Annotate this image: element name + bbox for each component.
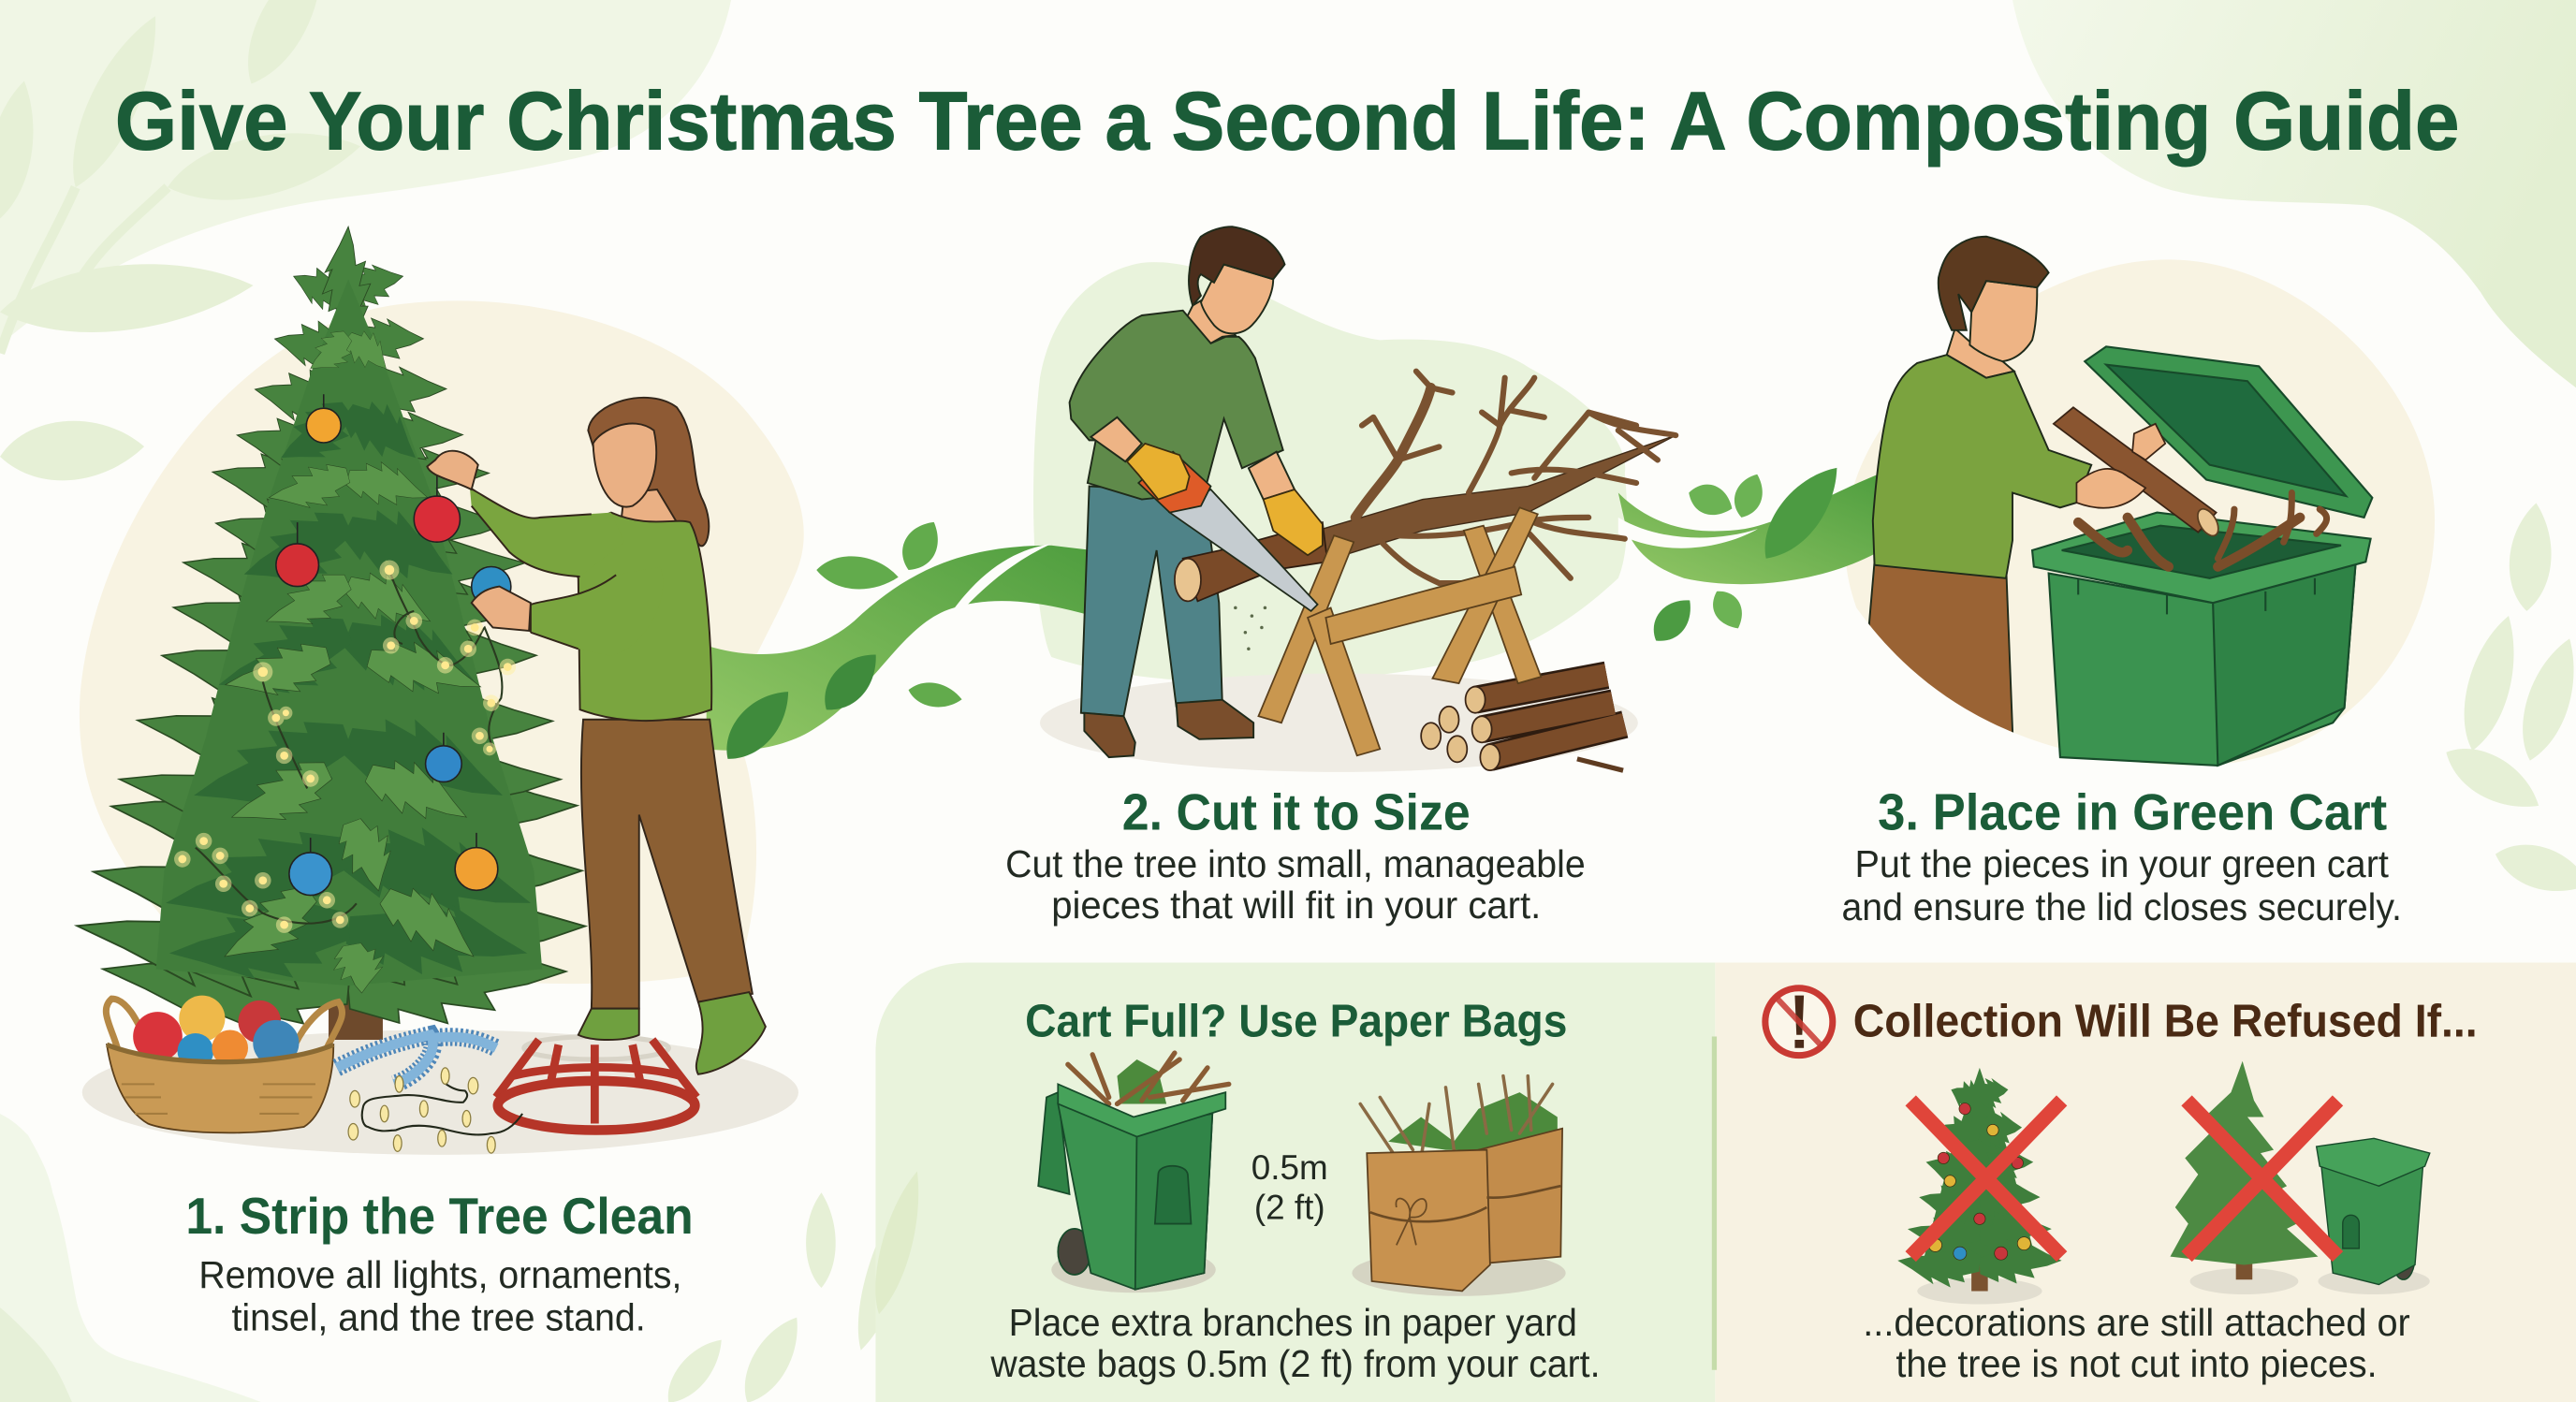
lit fronds bbox=[212, 322, 490, 997]
light string on floor bbox=[348, 1068, 522, 1153]
refused: decorated tree bbox=[1896, 1068, 2063, 1305]
shadows under cart and bags bbox=[1051, 1247, 1566, 1296]
refused: uncut tree beside cart bbox=[2170, 1061, 2430, 1294]
cut log bbox=[1183, 522, 1327, 601]
man sawing bbox=[1070, 226, 1295, 757]
step 2 body: Cut the tree into small, manageable bbox=[1005, 842, 1586, 885]
backdrop blob: step 3 bbox=[1845, 259, 2435, 766]
distance label: 0.5m bbox=[1251, 1148, 1328, 1187]
outer fronds bbox=[72, 226, 590, 1039]
shadow fronds bbox=[155, 388, 542, 994]
ground shadow: step 2 bbox=[1040, 674, 1638, 772]
ribbon: step 1 to step 2 bbox=[707, 514, 1092, 771]
tree trunk bbox=[329, 961, 383, 1040]
panel: cart full: waste bags 0.5m (2 ft) from your cart. bbox=[989, 1342, 1600, 1385]
wicker basket with ornaments bbox=[106, 996, 343, 1132]
step 1 illustration bbox=[72, 226, 798, 1155]
panel heading: cart full: Cart Full? Use Paper Bags bbox=[1025, 996, 1567, 1046]
work gloves bbox=[1127, 444, 1323, 555]
panel: cart full bbox=[864, 962, 1715, 1402]
backdrop blob: step 1 bbox=[80, 300, 804, 984]
man placing log bbox=[1868, 236, 2093, 733]
step 1 caption: tinsel, and the tree stand. bbox=[231, 1296, 646, 1339]
step 1 body: Remove all lights, ornaments, bbox=[198, 1253, 681, 1296]
step 2 caption bbox=[1005, 783, 1586, 927]
step 2 illustration bbox=[1040, 226, 1676, 772]
ornaments on tree bbox=[276, 394, 511, 896]
step 3 illustration bbox=[1856, 237, 2372, 772]
log in hand bbox=[2054, 407, 2217, 533]
woman decorating tree bbox=[427, 398, 766, 1074]
christmas tree bbox=[72, 226, 590, 1039]
sawdust bbox=[1234, 606, 1266, 650]
branched tree limb bbox=[1323, 372, 1676, 583]
saw bbox=[1138, 452, 1318, 611]
panel text: cart full: Place extra branches in paper yard bbox=[1009, 1301, 1577, 1344]
step 2 heading: 2. Cut it to Size bbox=[1122, 783, 1471, 840]
step 3 caption: and ensure the lid closes securely. bbox=[1841, 885, 2402, 928]
panel text: refused: ...decorations are still attached or bbox=[1863, 1301, 2410, 1344]
panel: collection refused: the tree is not cut into pieces. bbox=[1895, 1342, 2378, 1385]
step 3 heading: 3. Place in Green Cart bbox=[1878, 783, 2387, 840]
tinsel bbox=[337, 1035, 496, 1084]
icon: prohibited exclamation bbox=[1765, 988, 1833, 1056]
ribbon: step 2 to step 3 bbox=[1618, 455, 1881, 650]
hands bbox=[2076, 424, 2165, 508]
step 1 heading: 1. Strip the Tree Clean bbox=[185, 1188, 694, 1245]
step 1 caption bbox=[185, 1188, 694, 1339]
title: Give Your Christmas Tree a Second Life: A Composting Guide bbox=[115, 76, 2459, 168]
step 2 caption: pieces that will fit in your cart. bbox=[1051, 884, 1541, 927]
ground shadow: step 1 bbox=[82, 1030, 798, 1155]
full green cart with branches bbox=[1038, 1053, 1229, 1290]
paper yard waste bags bbox=[1360, 1076, 1562, 1292]
log pile bbox=[1421, 675, 1625, 770]
backdrop blob: step 2 bbox=[1033, 262, 1627, 683]
step 3 body: Put the pieces in your green cart bbox=[1855, 842, 2389, 885]
string lights on tree bbox=[174, 560, 516, 933]
cut log end bbox=[1175, 559, 1201, 601]
distance label: (2 ft) bbox=[1254, 1188, 1325, 1226]
sawhorse bbox=[1258, 507, 1541, 755]
branches in cart bbox=[2078, 493, 2327, 567]
tree core bbox=[156, 279, 542, 986]
wheel bbox=[1058, 1229, 1090, 1275]
log cut end bbox=[2193, 505, 2222, 539]
tree stand bbox=[496, 1036, 696, 1131]
distance label bbox=[1251, 1148, 1328, 1226]
panel heading: refused: Collection Will Be Refused If... bbox=[1853, 996, 2478, 1046]
step 3 caption bbox=[1841, 783, 2402, 928]
green cart bbox=[2032, 346, 2372, 766]
panel: collection refused bbox=[1712, 962, 2576, 1402]
